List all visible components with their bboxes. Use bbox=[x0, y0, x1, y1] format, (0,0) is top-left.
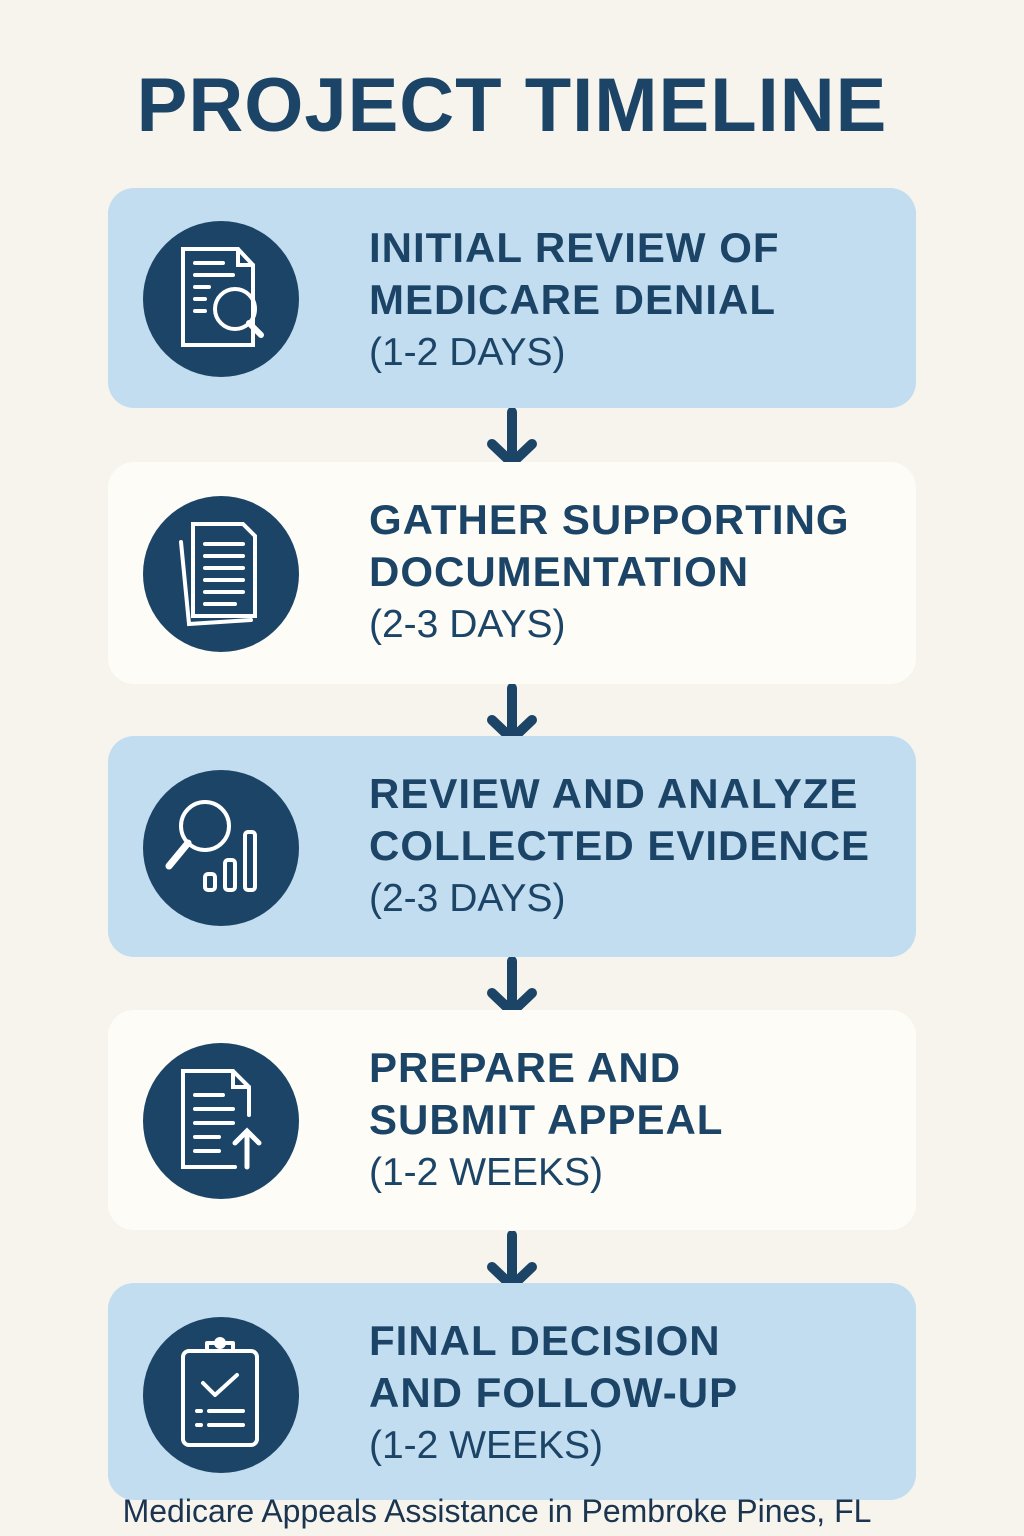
footer caption: Medicare Appeals Assistance in Pembroke Pines, FL bbox=[123, 1493, 871, 1529]
arrow 1 bbox=[487, 408, 537, 462]
text: step 3 bbox=[369, 770, 870, 920]
arrow 4 bbox=[487, 1231, 537, 1283]
panel: step 2 bbox=[108, 462, 916, 684]
text: step 5: AND FOLLOW-UP bbox=[369, 1369, 738, 1416]
icon: documents bbox=[143, 496, 299, 652]
panel: step 5 bbox=[108, 1283, 916, 1500]
title: PROJECT TIMELINE bbox=[137, 63, 887, 148]
icon: document with magnifier bbox=[143, 221, 299, 377]
text: step 3: (2-3 DAYS) bbox=[369, 877, 566, 920]
panel: step 1 bbox=[108, 188, 916, 408]
text: step 1: MEDICARE DENIAL bbox=[369, 276, 776, 323]
text: step 1: (1-2 DAYS) bbox=[369, 331, 566, 374]
text: step 5: FINAL DECISION bbox=[369, 1317, 721, 1364]
text: step 4: PREPARE AND bbox=[369, 1044, 681, 1091]
text: step 4 bbox=[369, 1044, 723, 1194]
icon: document upload bbox=[143, 1043, 299, 1199]
arrow 2 bbox=[487, 684, 537, 736]
text: step 4: (1-2 WEEKS) bbox=[369, 1151, 603, 1194]
panel: step 3 bbox=[108, 736, 916, 957]
text: step 1: INITIAL REVIEW OF bbox=[369, 224, 780, 271]
text: step 2: GATHER SUPPORTING bbox=[369, 496, 850, 543]
text: step 5 bbox=[369, 1317, 738, 1467]
arrow 3 bbox=[487, 957, 537, 1010]
text: step 2: (2-3 DAYS) bbox=[369, 603, 566, 646]
text: step 4: SUBMIT APPEAL bbox=[369, 1096, 723, 1143]
icon: clipboard check bbox=[143, 1317, 299, 1473]
text: step 3: COLLECTED EVIDENCE bbox=[369, 822, 870, 869]
icon: magnifier with chart bbox=[143, 770, 299, 926]
text: step 3: REVIEW AND ANALYZE bbox=[369, 770, 858, 817]
text: step 2: DOCUMENTATION bbox=[369, 548, 749, 595]
text: step 2 bbox=[369, 496, 850, 646]
panel: step 4 bbox=[108, 1010, 916, 1230]
text: step 1 bbox=[369, 224, 780, 374]
text: step 5: (1-2 WEEKS) bbox=[369, 1424, 603, 1467]
